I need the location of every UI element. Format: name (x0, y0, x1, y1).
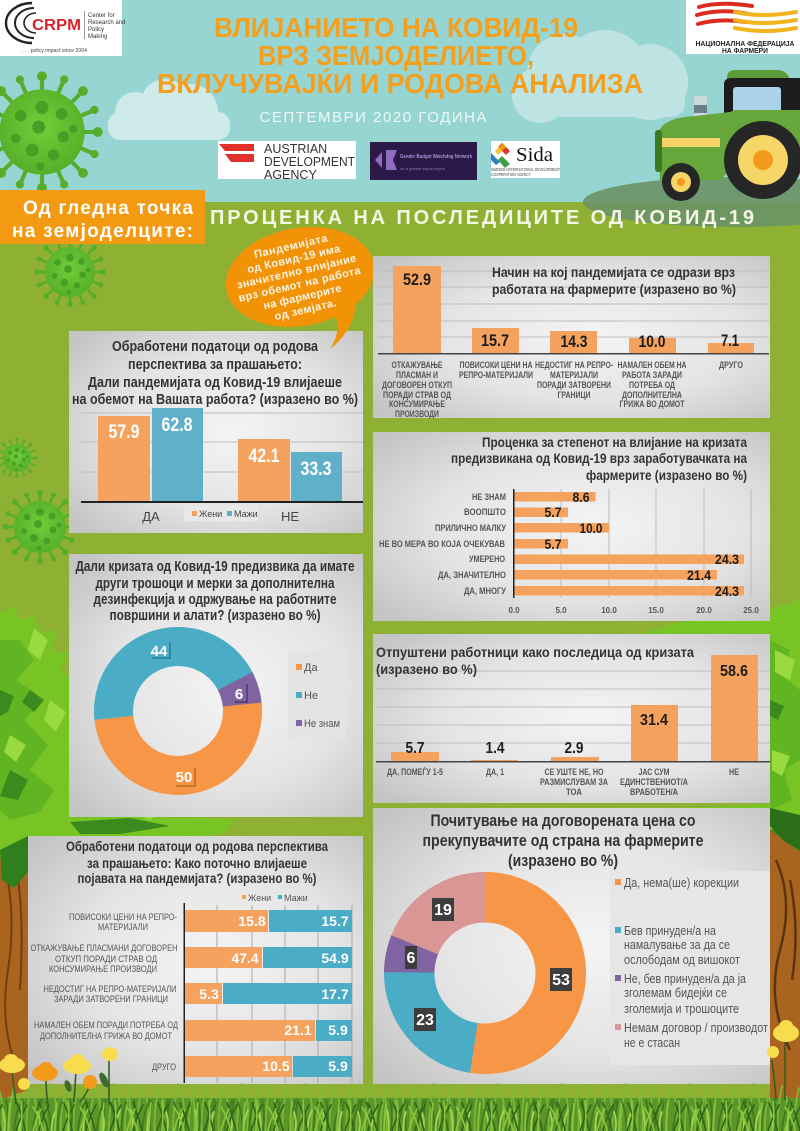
axis ticks: 0.0 (508, 606, 520, 615)
callout: Пандемијата (253, 232, 330, 261)
legend: не е стасан (624, 1036, 680, 1050)
category labels: ОТКАЖУВАЊЕ (392, 360, 442, 370)
icon: virus 2 (34, 236, 106, 308)
flowers: bottom right (767, 1020, 799, 1100)
category labels (387, 767, 739, 797)
title: ВРЗ ЗЕМЈОДЕЛИЕТО, (258, 40, 534, 71)
heading: Почитување на договорената цена со (430, 812, 696, 830)
panel: disinfection costs (69, 554, 363, 817)
legend: Мажи (284, 893, 308, 903)
right tree foliage (640, 600, 800, 860)
donut chart (91, 624, 265, 798)
category labels: НЕ (729, 767, 739, 777)
category labels: ДОГОВОРЕН ОТКУП (382, 380, 452, 390)
logo: CRPM: Research and (88, 20, 125, 26)
heading (422, 812, 704, 870)
bar chart: 2.9 (564, 740, 584, 757)
stacked bar chart: 5.3 (199, 986, 219, 1002)
legend (288, 651, 346, 738)
axis ticks: 10.0 (601, 606, 617, 615)
heading (72, 339, 358, 408)
heading (66, 839, 328, 886)
category labels: ОТКУП ПОРАДИ СТРАВ ОД (55, 954, 157, 965)
donut chart: 6 (407, 950, 416, 967)
stacked bar chart: 17.7 (321, 986, 349, 1002)
bar chart (376, 655, 770, 762)
horizontal bar chart: 5.7 (544, 504, 562, 520)
category labels: НАМАЛЕН ОБЕМ ПОРАДИ ПОТРЕБА ОД (34, 1020, 178, 1031)
icon: tractor (583, 70, 800, 227)
icon: virus 4 (3, 490, 77, 564)
stacked bar chart: 15.7 (321, 913, 349, 929)
left tree foliage (0, 606, 236, 860)
category labels: НЕДОСТИГ НА РЕПРО-МАТЕРИЈАЛИ (44, 984, 177, 995)
category labels (382, 360, 743, 419)
heading: други трошоци и мерки за дополнителна (96, 576, 335, 592)
category labels: ПОРАДИ СТРАВ ОД (383, 390, 451, 400)
logo: Sida: COOPERATION AGENCY (491, 172, 531, 177)
category labels: ДА, ПОМЕЃУ 1-5 (387, 767, 443, 777)
heading: Дали кризата од Ковид-19 предизвика да имате (76, 559, 354, 575)
logo: National Federation of Farmers (686, 0, 800, 55)
section label: farmers' point of view: Од гледна точка (23, 198, 193, 219)
heading: појавата на пандемијата? (изразено во %) (78, 871, 316, 886)
horizontal bar chart (513, 489, 744, 599)
category labels: ДА, МНОГУ (464, 586, 506, 596)
legend: Не, бев принуден/а да ја (624, 972, 746, 986)
heading: за прашањето: Како поточно влијаеше (87, 856, 307, 871)
cloud: left (108, 79, 230, 140)
category labels: РАЗМИСЛУВАМ ЗА (540, 777, 608, 787)
callout: врз обемот на работа (237, 265, 363, 305)
logo: Sida: Sida (516, 144, 553, 166)
category labels (379, 492, 506, 596)
heading: Обработени податоци од родова перспектива (66, 839, 328, 854)
callout: од Ковид-19 има (246, 243, 342, 276)
logo: CRPM: Center for (88, 13, 115, 19)
stacked bar chart: 5.9 (328, 1058, 348, 1074)
logo: Austrian Development Agency: DEVELOPMENT (264, 155, 355, 169)
right tree trunk (770, 830, 800, 1100)
bar chart: 62.8 (162, 415, 192, 436)
heading: на обемот на Вашата работа? (изразено во %) (72, 392, 358, 408)
axis ticks: 20.0 (696, 606, 712, 615)
logo: Austrian Development Agency (218, 141, 356, 182)
axis ticks (508, 606, 759, 615)
legend: Да (304, 662, 318, 674)
heading: површини и алати? (изразено во %) (110, 608, 321, 624)
heading: фармерите (изразено во %) (586, 468, 747, 483)
logo: Austrian Development Agency: AUSTRIAN (264, 142, 327, 156)
stacked bar chart: 21.1 (284, 1022, 312, 1038)
heading: дезинфекција и одржување на работните (94, 592, 336, 608)
bar chart: 14.3 (560, 332, 588, 351)
grass (0, 1080, 800, 1131)
legend: ослободам од вишокот (624, 953, 740, 967)
category labels: КОНСУМИРАЊЕ (389, 399, 445, 409)
category labels: КОНСУМИРАЊЕ ПРОИЗВОДИ (49, 964, 157, 975)
bar chart: 15.7 (481, 331, 509, 350)
category labels: ДРУГО (152, 1062, 176, 1073)
legend: Жени (248, 893, 271, 903)
cloud: right (512, 30, 688, 123)
callout: од земјата. (273, 297, 337, 323)
bar chart: 31.4 (640, 712, 668, 729)
logo: CRPM: Policy (88, 27, 104, 33)
donut chart: 6 (235, 686, 243, 703)
category labels: НЕ ВО МЕРА ВО КОЈА ОЧЕКУВАВ (379, 539, 505, 549)
bar chart: 5.7 (406, 740, 425, 757)
section heading: ПРОЦЕНКА НА ПОСЛЕДИЦИТЕ ОД КОВИД-19 (210, 207, 754, 229)
callout: на фармерите (262, 283, 343, 312)
donut chart (386, 874, 584, 1072)
logo: Gender Budget Watchdog Network: for a greater equal region (400, 166, 445, 171)
category labels: РАБОТА ЗАРАДИ (622, 370, 682, 380)
category labels: НЕДОСТИГ НА РЕПРО- (535, 360, 613, 370)
heading: (изразено во %) (508, 852, 618, 870)
flowers: bottom left (0, 1047, 118, 1105)
stacked bar chart: 5.9 (328, 1022, 348, 1038)
category labels: ПРИЛИЧНО МАЛКУ (435, 523, 506, 533)
stacked bar chart (184, 903, 352, 1083)
heading: работата на фармерите (изразено во %) (492, 281, 736, 297)
legend: Не (304, 690, 318, 702)
category labels: РЕПРО-МАТЕРИЈАЛИ (459, 370, 533, 380)
bar chart: 57.9 (108, 422, 140, 443)
left tree trunk (0, 846, 28, 1100)
category labels: УМЕРЕНО (469, 554, 505, 564)
bar chart (378, 266, 769, 354)
legend: зголемам бидејќи се (624, 986, 727, 1000)
heading: Проценка за степенот на влијание на кризата (482, 435, 747, 450)
bar chart: 58.6 (720, 663, 748, 680)
legend: Жени (199, 509, 222, 519)
panel: gender perspective on workload (69, 331, 363, 533)
panel: how the pandemic reflected on farmers' work (373, 256, 770, 419)
heading: прекупувачите од страна на фармерите (422, 832, 704, 850)
panel: impact on farmers' income (373, 432, 770, 621)
bar chart: 42.1 (248, 446, 280, 467)
axis ticks: 5.0 (555, 606, 567, 615)
logo: CRPM (0, 0, 125, 56)
category labels: СЕ УШТЕ НЕ, НО (544, 767, 604, 777)
donut chart: 23 (416, 1012, 434, 1029)
category labels: ДОПОЛНИТЕЛНА (622, 390, 682, 400)
date subtitle: СЕПТЕМВРИ 2020 ГОДИНА (260, 109, 486, 126)
bar chart: 1.4 (486, 740, 505, 757)
category labels: ДОПОЛНИТЕЛНА ГРИЖА ВО ДОМОТ (40, 1031, 172, 1042)
donut chart: 19 (434, 902, 452, 919)
panel: gender perspective on how the pandemic affected (28, 836, 363, 1084)
category labels: ГРАНИЦИ (558, 390, 590, 400)
heading: Обработени податоци од родова (112, 339, 319, 355)
category labels: ТОА (566, 787, 582, 797)
legend (242, 893, 308, 903)
category labels (30, 912, 178, 1073)
donut chart: 44 (151, 643, 168, 660)
logo: Gender Budget Watchdog Network: Gender Budget Watchdog Network (400, 154, 473, 160)
panel: respect of the agreed price (373, 808, 770, 1084)
icon: large virus (0, 71, 103, 193)
category labels: ДРУГО (719, 360, 743, 370)
stacked bar chart: 47.4 (231, 950, 259, 966)
category labels: МАТЕРИЈАЛИ (550, 370, 598, 380)
category labels: ЗАРАДИ ЗАТВОРЕНИ ГРАНИЦИ (54, 994, 168, 1005)
category labels: ПРОИЗВОДИ (395, 409, 439, 419)
legend: Немам договор / производот (624, 1021, 768, 1035)
category labels: ОТКАЖУВАЊЕ ПЛАСМАНИ ДОГОВОРЕН (30, 943, 178, 954)
section label: farmers' point of view: на земјоделците: (12, 221, 193, 242)
category labels: ПОВИСОКИ ЦЕНИ НА РЕПРО- (69, 912, 177, 923)
legend: Бев принуден/а на (624, 924, 716, 938)
category labels: ПОВИСОКИ ЦЕНИ НА (460, 360, 533, 370)
axis ticks: 15.0 (648, 606, 664, 615)
category labels: НАМАЛЕН ОБЕМ НА (618, 360, 687, 370)
category labels: ПОРАДИ ЗАТВОРЕНИ (537, 380, 611, 390)
logo: Sida (491, 141, 560, 178)
legend: Не знам (304, 718, 340, 730)
bar chart: 33.3 (300, 459, 332, 480)
legend: Да, нема(ше) корекции (624, 876, 739, 890)
heading (492, 264, 736, 297)
heading (376, 644, 694, 677)
horizontal bar chart: 21.4 (687, 567, 711, 583)
donut chart: 50 (176, 769, 192, 786)
heading (76, 559, 354, 624)
heading: перспектива за прашањето: (128, 357, 302, 373)
logo: Austrian Development Agency: AGENCY (264, 168, 317, 182)
heading: предизвикана од Ковид-19 врз заработувачката на (451, 451, 747, 466)
legend (184, 505, 258, 521)
section label: farmers' point of view (0, 190, 205, 244)
title: ВЛИЈАНИЕТО НА КОВИД-19 (214, 12, 578, 43)
heading (451, 435, 747, 483)
stacked bar chart: 15.8 (238, 913, 266, 929)
callout (218, 216, 382, 349)
panel: dismissed workers (373, 634, 770, 803)
legend: намалување за да се (624, 938, 730, 952)
category labels: ВООПШТО (464, 507, 506, 517)
stacked bar chart: 10.5 (262, 1058, 290, 1074)
category labels: МАТЕРИЈАЛИ (98, 922, 148, 933)
heading: Отпуштени работници како последица од кризата (376, 644, 694, 660)
category labels: НЕ ЗНАМ (472, 492, 506, 502)
logo: Gender Budget Watchdog Network (370, 142, 477, 180)
logo: CRPM: . . . policy impact since 2004 (22, 48, 87, 54)
title (157, 12, 643, 99)
category labels: ГРИЖА ВО ДОМОТ (620, 399, 685, 409)
heading: (изразено во %) (376, 661, 477, 677)
horizontal bar chart: 5.7 (544, 536, 562, 552)
title: ВКЛУЧУВАЈЌИ И РОДОВА АНАЛИЗА (157, 68, 643, 99)
category labels: ЈАС СУМ (638, 767, 670, 777)
logo: Sida: SWEDISH INTERNATIONAL DEVELOPMENT (491, 167, 560, 172)
horizontal bar chart: 8.6 (572, 489, 590, 505)
bar chart: 52.9 (403, 270, 431, 289)
logo: CRPM: Making (88, 34, 107, 40)
background: sky (0, 0, 800, 202)
bar chart: 10.0 (638, 332, 666, 351)
callout: значително влијание (236, 253, 357, 292)
category labels: ПЛАСМАН И (396, 370, 438, 380)
horizontal bar chart: 10.0 (580, 520, 603, 536)
category labels: ПОТРЕБА ОД (629, 380, 675, 390)
logo: National Federation of Farmers: НА ФАРМЕРИ (722, 48, 768, 55)
bar chart: 7.1 (721, 331, 739, 350)
horizontal bar chart: 24.3 (715, 551, 739, 567)
bar chart: ДА (142, 509, 160, 524)
icon: virus 3 (0, 438, 37, 478)
legend: зголемија и трошоците (624, 1002, 739, 1016)
legend (610, 871, 770, 1065)
category labels: ЕДИНСТВЕНИОТ/А (620, 777, 688, 787)
heading: Начин на кој пандемијата се одрази врз (492, 264, 735, 280)
legend: Мажи (234, 509, 258, 519)
donut chart: 53 (552, 972, 570, 989)
axis ticks: 25.0 (743, 606, 759, 615)
category labels: ВРАБОТЕН/А (630, 787, 678, 797)
category labels: ДА, 1 (486, 767, 504, 777)
logo: CRPM: CRPM (32, 17, 81, 34)
heading: Дали пандемијата од Ковид-19 влијаеше (88, 375, 342, 391)
category labels: ДА, ЗНАЧИТЕЛНО (438, 570, 506, 580)
bar chart: НЕ (281, 509, 299, 524)
stacked bar chart: 54.9 (321, 950, 349, 966)
horizontal bar chart: 24.3 (715, 583, 739, 599)
bar chart (81, 408, 363, 524)
